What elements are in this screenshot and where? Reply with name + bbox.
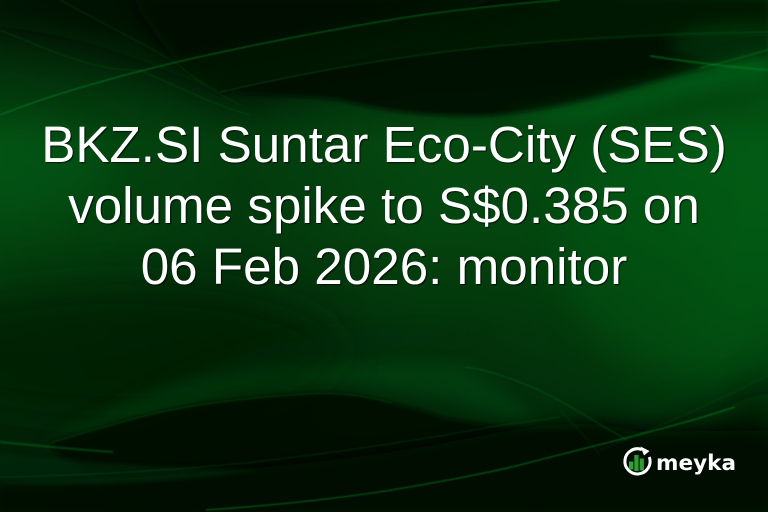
logo: meyka [623,446,736,476]
mid-left dim region [0,285,340,415]
top dark band above bright line [130,0,560,63]
bottom dark lobe [49,393,600,491]
main top dark lobe [220,34,768,116]
wordmark: meyka [656,451,736,475]
upper soft dark wave [100,331,490,415]
left glow [0,125,110,215]
title: BKZ.SI Suntar Eco-City (SES) [41,116,727,173]
icon: circular logo mark with bars [625,446,650,474]
bottom dark floor [0,424,768,512]
lighter green band above bottom lobe [40,363,540,445]
top left soft dark [0,0,600,100]
bottom right dark fade [520,380,768,512]
main top line [0,0,560,115]
title: volume spike to S$0.385 on [68,177,700,234]
right glow [560,130,768,370]
right green glow band [500,52,768,122]
title [41,116,727,295]
title: 06 Feb 2026: monitor [141,238,627,295]
upper right lift [670,23,768,67]
